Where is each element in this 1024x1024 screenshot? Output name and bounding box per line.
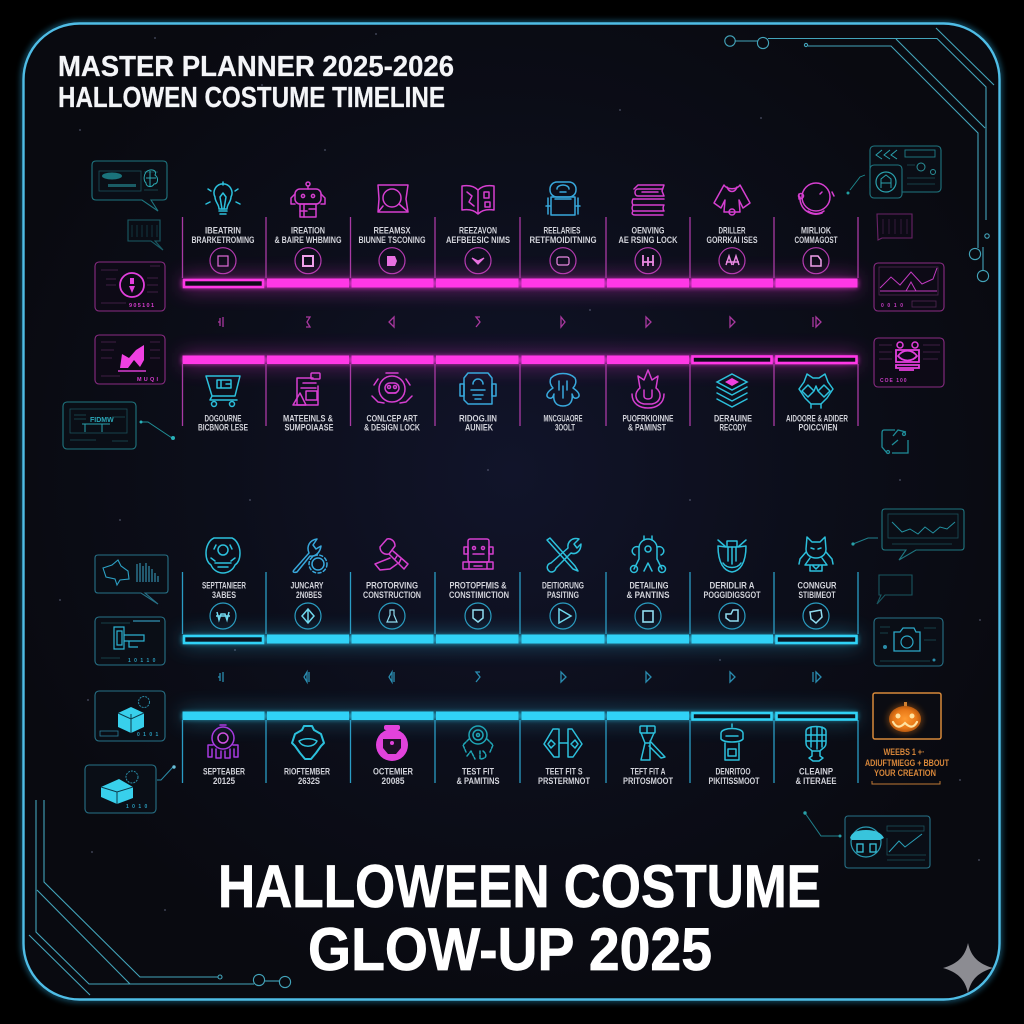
row labels: 2632S	[298, 775, 320, 786]
row labels: REEAMSX	[374, 224, 411, 236]
row labels: OCTEMIER	[373, 766, 413, 776]
side panel: small note left	[128, 220, 163, 250]
row labels: DETAILING	[630, 580, 668, 590]
icon: shopping cart	[206, 376, 240, 406]
side panel: small teal note	[877, 575, 912, 604]
row labels: DRILLER	[718, 224, 746, 236]
icon: cat spirit	[799, 537, 833, 571]
row labels: PRITOSMOOT	[623, 775, 673, 786]
row labels: OENVING	[632, 224, 664, 236]
icon: hammer tool	[375, 539, 408, 570]
icon: wrench and gear	[293, 539, 327, 573]
row labels: PRSTERMNOT	[538, 775, 590, 786]
row labels: & BAIRE WHBMING	[274, 234, 342, 245]
icon: crystal shield	[799, 374, 833, 408]
row labels: DENRITOO	[716, 766, 750, 776]
row labels: TEET FIT S	[546, 766, 582, 776]
side panel: blue machine card	[95, 617, 165, 665]
side panel: magenta gauge: 9 0 5 1 0 1	[129, 303, 154, 309]
icon: sparkle watermark	[943, 943, 993, 993]
side panel: magenta mask display: COE 100	[880, 378, 908, 384]
orange caption: ADIUFTMIEGG + BBOUT	[865, 758, 949, 769]
row labels: CLEAINP	[799, 766, 833, 776]
side panel: brain scan callout	[92, 161, 167, 211]
row labels: & PANTINS	[626, 589, 670, 600]
row labels: AIDOORE & ADIDER	[786, 412, 848, 424]
main title: HALLOWEEN COSTUME	[218, 853, 821, 920]
row labels: RIOFTEMBER	[284, 766, 330, 776]
title: master planner: MASTER PLANNER 2025-2026	[58, 51, 454, 83]
row labels	[203, 766, 836, 786]
icon: diamonds	[544, 729, 582, 757]
side panel: blue open box card: 0 1 0 1	[137, 732, 159, 738]
row labels: PROTOPFMIS &	[450, 580, 507, 590]
row labels: GORRKAI ISES	[706, 234, 758, 245]
side panel: teal profile card	[846, 146, 941, 198]
phase block 2: magenta lower row	[182, 356, 858, 432]
phase block 1: magenta upper row	[182, 182, 858, 288]
side panel: small magenta note	[877, 214, 912, 240]
row labels: 2N0BES	[296, 589, 322, 600]
orange caption: YOUR CREATION	[874, 768, 936, 779]
side panel: teal dashboard	[63, 402, 175, 449]
circuit traces: bottom left	[29, 800, 291, 995]
row labels: SEPTTANIEER	[202, 580, 246, 590]
side panel: magenta area chart: M U Q I	[137, 377, 158, 383]
row labels	[202, 580, 837, 600]
circuit traces: top right	[725, 28, 994, 282]
row labels: POICCVIEN	[798, 422, 838, 432]
row labels: RECODY	[720, 422, 747, 432]
title: master planner	[58, 51, 454, 114]
row labels	[192, 224, 838, 245]
step arrows: magenta	[218, 317, 821, 327]
row labels: DERAUINE	[714, 412, 752, 424]
row labels: STIBIMEOT	[798, 589, 836, 600]
phase block 4: cyan lower row	[182, 712, 858, 786]
icon: gear face	[292, 726, 324, 759]
icon: robot head blue	[460, 373, 496, 404]
row labels: PUOFRKIOINNE	[622, 412, 674, 424]
row labels: AEFBEESIC NIMS	[446, 234, 510, 245]
main title	[218, 853, 821, 983]
side panel: magenta mask display	[874, 338, 944, 387]
icon: flame creature	[632, 370, 664, 408]
small circle badges	[210, 248, 829, 274]
side panel: blue filled box card	[85, 765, 176, 813]
icon: creature blue	[547, 374, 579, 406]
title: master planner: HALLOWEN COSTUME TIMELINE	[58, 82, 445, 114]
row labels: DERIDLIR A	[710, 580, 755, 590]
side panel: magenta area chart	[95, 335, 165, 384]
icon: filled pot	[376, 725, 408, 761]
row labels: 20125	[213, 775, 235, 786]
row labels: CONNGUR	[798, 580, 837, 590]
side panel: robot head analytics	[803, 811, 930, 868]
icon: masked face	[206, 538, 240, 573]
row labels: SUMPOIAASE	[284, 422, 334, 432]
icon: orb with headset	[798, 183, 834, 214]
row labels: PIKITISSMOOT	[708, 775, 760, 786]
icon: brush canister	[640, 726, 665, 760]
step arrows: cyan	[218, 672, 821, 682]
panel: pumpkin reveal	[865, 693, 949, 784]
row labels: REELARIES	[544, 224, 580, 236]
row labels	[198, 412, 848, 432]
row labels: CONSTIMICTION	[449, 589, 509, 600]
icon: eye creature	[463, 726, 493, 759]
row labels: SEPTEABER	[203, 766, 245, 776]
main title: GLOW-UP 2025	[308, 916, 712, 983]
icon: robot face	[463, 539, 493, 569]
row labels: POGGIDIGSGOT	[704, 589, 761, 600]
orange caption	[865, 747, 949, 779]
icon: harp	[718, 540, 746, 572]
icon: magnifier frame	[378, 185, 408, 212]
row labels: BICBNOR LESE	[198, 422, 248, 432]
icon: shirt	[714, 185, 750, 215]
icon: open book	[462, 186, 494, 214]
icon: crossed tools	[547, 538, 581, 572]
row labels: RETFMOIDITNING	[530, 234, 596, 245]
row labels: & PAMINST	[628, 422, 666, 432]
row labels: PASITING	[547, 589, 579, 600]
row labels: IBEATRIN	[205, 224, 241, 236]
icon: light bulb	[206, 182, 240, 214]
row labels: COMMAGOST	[794, 234, 838, 245]
row labels: 3OOLT	[555, 422, 575, 432]
row labels: REEZAVON	[459, 224, 497, 236]
row labels: BRARKETROMING	[192, 234, 254, 245]
icon: layered stack	[717, 374, 747, 407]
row labels: & DESIGN LOCK	[364, 422, 420, 432]
row labels: CONSTRUCTION	[363, 589, 421, 600]
row labels: DEITIORUNG	[542, 580, 584, 590]
row labels: CONLCEP ART	[366, 412, 418, 424]
phase block 3: cyan upper row	[182, 536, 858, 644]
icon: robot	[291, 182, 325, 217]
row labels: MATEEINLS &	[283, 412, 333, 424]
side panel: blue filled box card: 1 0 1 0	[126, 804, 148, 810]
icon: stack of books	[632, 185, 664, 215]
orange caption: WEEBS 1 +·	[884, 747, 924, 758]
side panel: blue tool callout	[95, 555, 168, 604]
side panel: magenta line chart: 0 0 1 0	[881, 303, 903, 309]
row labels: TEFT FIT A	[630, 766, 666, 776]
icon: robot bust	[721, 724, 743, 760]
row labels: 3ABES	[212, 589, 236, 600]
row labels: & ITERAEE	[796, 775, 836, 786]
row labels: & PAMITINS	[456, 775, 500, 786]
icon: monster head	[372, 373, 412, 403]
row labels: MNCGUAORE	[544, 412, 582, 424]
icon: purple robot	[208, 725, 238, 758]
row labels: BIUNNE TSCONING	[358, 234, 426, 245]
icon: gauntlet	[806, 726, 826, 761]
row labels: PROTORVING	[366, 580, 418, 590]
row labels: 20085	[382, 775, 404, 786]
side panel: magenta line chart	[874, 263, 944, 311]
icon: robot at desk	[546, 182, 580, 215]
row labels: IREATION	[291, 224, 325, 236]
row labels: JUNCARY	[290, 580, 324, 590]
row labels: DOGOURNE	[204, 412, 242, 424]
icon: recycle bracket	[882, 430, 908, 454]
side panel: blue open box card	[95, 691, 165, 741]
icon: octopus	[630, 536, 666, 572]
small circle badges	[210, 603, 829, 629]
side panel: camera card	[874, 618, 943, 666]
icon: glowing pumpkin	[887, 702, 923, 734]
row labels: MIRLIOK	[801, 224, 831, 236]
row labels: AE RSING LOCK	[618, 234, 678, 245]
row labels: AUNIEK	[465, 422, 493, 432]
icon: materials document	[293, 373, 320, 405]
side panel: magenta gauge	[95, 262, 165, 311]
side panel: teal dashboard: FIDMW	[90, 417, 114, 424]
side panel: teal waveform callout	[851, 509, 964, 560]
row labels: TEST FIT	[462, 766, 494, 776]
row labels: RIDOG.IIN	[459, 412, 497, 424]
side panel: blue machine card: 1 0 1 1 0	[128, 658, 156, 664]
